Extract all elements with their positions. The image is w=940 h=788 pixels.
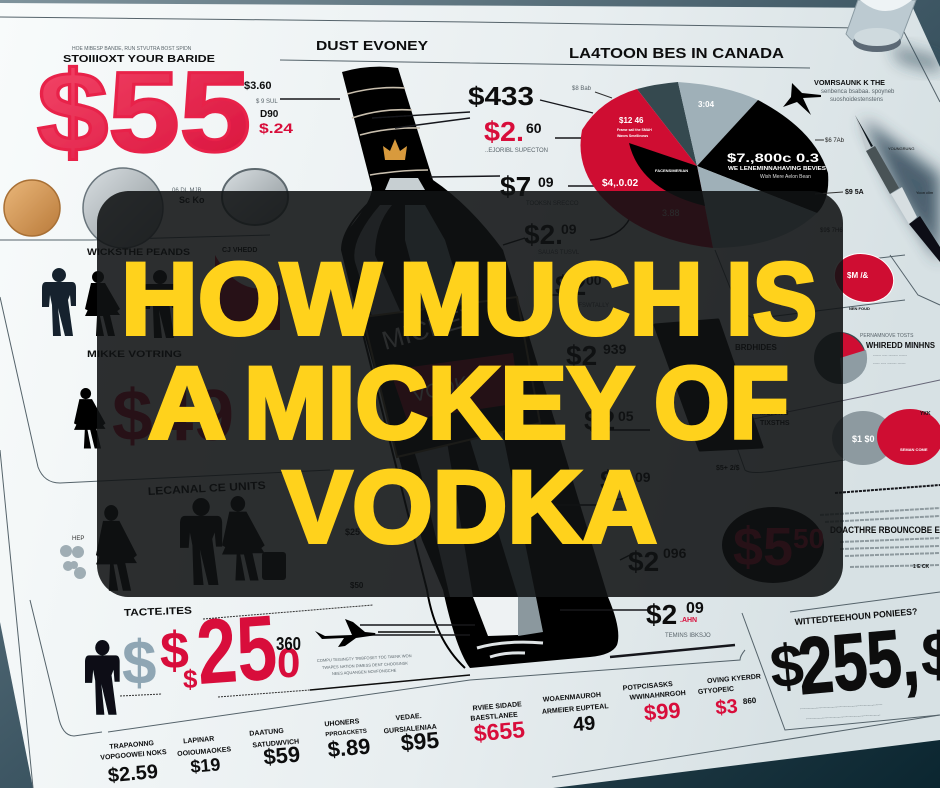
black price ellipse: 50 bbox=[793, 523, 824, 554]
coins bbox=[4, 168, 288, 248]
venn: SEMAN COME bbox=[900, 447, 928, 452]
panel: demographics left: CJ VHEDD bbox=[222, 247, 257, 254]
bottom price strip: GURSIALENIAA bbox=[383, 724, 437, 735]
pie chart: $4,.0.02 bbox=[602, 178, 639, 189]
price column: $2 bbox=[555, 270, 586, 301]
bottom price strip: TRAPAONNG bbox=[109, 740, 155, 751]
right column charts: YKK bbox=[920, 411, 931, 417]
top-left heading: STOIIIOXT YOUR BARIDE bbox=[63, 54, 215, 65]
bottom price strip: WOAENMAUROH bbox=[543, 692, 601, 704]
pie chart: $12 46 bbox=[619, 116, 644, 125]
bottom price strip: 49 bbox=[572, 712, 596, 736]
title: HOW bbox=[121, 242, 382, 356]
price column: SAUAS TUSVL bbox=[538, 250, 580, 256]
bottom price strip: LAPINAR bbox=[183, 736, 215, 745]
bottom price strip: VEDAE. bbox=[395, 713, 422, 722]
section headings: DUST EVONEY bbox=[316, 38, 428, 53]
side prices bbox=[244, 80, 293, 136]
price column bbox=[280, 81, 735, 657]
price column: ..EJORIBL SUPECTON bbox=[485, 148, 548, 154]
bottle label: VODKA bbox=[410, 370, 484, 407]
top-left heading: HOE MIBESP BANDE, RUN STVUTRA BOST SPIDN bbox=[72, 46, 192, 52]
bottle label: MICKEY bbox=[378, 299, 482, 356]
phone bbox=[655, 320, 762, 450]
price column: $2 bbox=[584, 405, 615, 436]
bottom price strip: VOPGOOWEI NOKS bbox=[100, 749, 167, 762]
top-right caption: VOMRSAUNK K THE bbox=[814, 80, 885, 87]
bottom price strip: $99 bbox=[643, 697, 682, 726]
icon: pen with shadow: YOUNGRUNG bbox=[888, 146, 914, 151]
price column: BNEFSWTALLY bbox=[566, 303, 609, 309]
bottom price strip: $95 bbox=[400, 727, 440, 756]
panel: right bottom price: -------------------------------------------------------- bbox=[806, 712, 881, 721]
price column: TOOKSN SRECCO bbox=[526, 201, 579, 207]
panel: demographics left: WICKSTHE PEANDS bbox=[87, 247, 190, 257]
top-right caption: senbenca bsabaa. spoyneb bbox=[821, 89, 895, 95]
icon: person bbox=[85, 640, 120, 715]
icon: glass bbox=[846, 0, 940, 72]
right column charts: ------ ---- ------- ------ bbox=[873, 352, 908, 357]
panel: tastes with red price: NEES AQUANGEN NOVFONGCHE bbox=[332, 668, 397, 676]
bottom price strip: $19 bbox=[190, 754, 221, 777]
bottom price strip: SATUDWVICH bbox=[252, 738, 300, 750]
panel: tastes with red price: TACTE.ITES bbox=[124, 606, 192, 619]
title: A bbox=[148, 346, 226, 460]
bottle bbox=[342, 67, 618, 668]
title: IS bbox=[726, 242, 817, 356]
pie chart: Wish Mere Aelon Bean bbox=[760, 174, 811, 180]
pie chart: WE LENEMINNAHAVING BEVIES bbox=[728, 166, 827, 172]
pie chart: 3:04 bbox=[698, 100, 715, 109]
panel: tastes with red price: COMPU TEISINGTY TRIBFOSET TOC TAENK WON bbox=[317, 653, 412, 663]
bottom price strip: OOIOUMAOKES bbox=[177, 746, 232, 758]
bottom price strip: RVIEE SIDADE bbox=[472, 701, 522, 712]
price column: $2 bbox=[566, 340, 597, 371]
pie small bbox=[814, 332, 867, 384]
pie chart: $7.,800c 0.3 bbox=[727, 151, 819, 165]
title: VODKA bbox=[283, 450, 657, 564]
side prices: $ 9 SUL bbox=[256, 99, 278, 105]
bottom price strip: $.89 bbox=[327, 733, 371, 762]
venn: $1 $0 bbox=[852, 434, 875, 444]
pie labels bbox=[572, 86, 864, 234]
price column: 00 bbox=[586, 272, 602, 288]
right column charts: $M /& bbox=[847, 271, 869, 280]
bottom price strip: $59 bbox=[262, 741, 301, 770]
title: MICKEY bbox=[244, 346, 634, 460]
price column: TEMINS IBKSJO bbox=[665, 633, 711, 639]
bottle highlights bbox=[347, 88, 428, 175]
bottom price strip: $655 bbox=[473, 716, 526, 746]
panel: tastes with red price: $ bbox=[122, 629, 156, 698]
title: OF bbox=[654, 346, 789, 460]
panel: demographics left: MIKKE VOTRING bbox=[87, 349, 182, 359]
title: MUCH bbox=[399, 242, 703, 356]
coins: Sc Ko bbox=[179, 195, 205, 205]
bottom price strip: DAATUNG bbox=[249, 728, 285, 738]
icon: pen with shadow bbox=[855, 115, 940, 262]
right column charts: $5+ 2/$ bbox=[716, 465, 740, 472]
pie labels: $9 5A bbox=[845, 189, 864, 196]
side prices: $.24 bbox=[259, 120, 293, 136]
top-left heading bbox=[63, 46, 215, 65]
price column: $2 bbox=[646, 599, 677, 630]
red price ghost: $49 bbox=[112, 376, 234, 456]
panel: right bottom price: $ bbox=[767, 631, 806, 701]
black price ellipse bbox=[722, 507, 824, 583]
venn bbox=[832, 409, 940, 465]
section headings bbox=[316, 38, 784, 62]
panel: tastes with red price: TWAPES NATION DIMESS DENT CHOOSINSK bbox=[322, 660, 408, 670]
icon: pen with shadow: Yoon clim bbox=[916, 190, 934, 195]
panel: tastes with red price: 25 bbox=[193, 597, 280, 704]
panel: right bottom price: WITTEDTEEHOUN PONIEES? bbox=[794, 606, 918, 627]
pie chart: Frame sail the SMAH bbox=[617, 128, 652, 132]
icons: people bbox=[42, 268, 286, 591]
title bbox=[121, 242, 817, 564]
dark title overlay bbox=[97, 191, 843, 597]
bottom price strip: UHONERS bbox=[324, 718, 360, 728]
bottle label bbox=[363, 297, 540, 457]
price column: $2. bbox=[484, 116, 524, 147]
bottom price strip: ARMEIER EUPTEAL bbox=[542, 703, 610, 716]
pie labels: $8 Bab bbox=[572, 86, 592, 92]
right column charts: MUPATS bbox=[760, 410, 789, 417]
pie chart: 3.88 bbox=[662, 208, 680, 218]
top-right caption bbox=[814, 80, 895, 103]
bottom price strip: $2.59 bbox=[107, 761, 159, 787]
price column: 09 bbox=[686, 600, 704, 617]
right column charts: NEN FOUD bbox=[849, 306, 870, 311]
price column: 05 bbox=[618, 408, 634, 424]
section headings: LA4TOON BES IN CANADA bbox=[569, 45, 784, 62]
panel: tastes with red price: 0 bbox=[277, 639, 300, 686]
pie chart: Waves Smellinows bbox=[617, 134, 648, 138]
big red price: $55 bbox=[37, 49, 251, 176]
panel: demographics left: HEP bbox=[72, 536, 84, 542]
price column: $433 bbox=[468, 81, 534, 111]
coins: 06 DL MJB bbox=[172, 188, 201, 194]
panel: tastes with red price: 360 bbox=[276, 634, 301, 654]
price column: $2 bbox=[628, 546, 659, 577]
right column charts: ----- ---- ------- ------ bbox=[873, 360, 906, 365]
price column: $2. bbox=[524, 219, 563, 250]
bottom price strip: WWINAHNRGOH bbox=[629, 690, 686, 702]
bottom price strip: OVING KYERDR bbox=[707, 673, 761, 685]
price column: 09 bbox=[538, 174, 554, 190]
right column charts: BRDHIDES bbox=[735, 343, 777, 352]
price column: .AHN bbox=[680, 617, 697, 624]
panel: demographics left: LECANAL CE UNITS bbox=[148, 480, 266, 498]
pie chart: FACENSIMERIAN bbox=[655, 168, 688, 173]
panel: tastes with red price: $ bbox=[183, 664, 198, 694]
right column charts: TIXSTHS bbox=[760, 420, 790, 427]
crown bbox=[383, 139, 407, 160]
panel: right bottom price: -------------------------------------------------------------- bbox=[800, 702, 883, 711]
side prices: $3.60 bbox=[244, 80, 272, 92]
right column charts: 1 E CK bbox=[913, 564, 930, 570]
panel: tastes with red price bbox=[85, 597, 470, 715]
price column: 096 bbox=[663, 545, 687, 561]
bottom price strip: POTPCISASKS bbox=[622, 681, 673, 692]
bottom price strip: GTYOPEIC bbox=[698, 686, 734, 696]
price column: 09 bbox=[635, 469, 651, 485]
right column charts: PERNAMNOVE TOSTS bbox=[860, 333, 914, 339]
black price ellipse: $5 bbox=[733, 517, 793, 577]
price column: 09 bbox=[561, 221, 577, 237]
bottom price strip: 860 bbox=[743, 696, 757, 706]
top-right caption: suoshoidestenstens bbox=[830, 97, 883, 103]
bottom price strip: PPROACKETS bbox=[325, 729, 367, 738]
bottom price strip: BAESTLANEE bbox=[470, 712, 518, 723]
icon: plane lower bbox=[315, 619, 375, 647]
pie labels: $9$ 7H6 bbox=[820, 228, 843, 234]
price column: 60 bbox=[526, 120, 542, 136]
panel: demographics left: $25 bbox=[345, 527, 360, 537]
price column: $2 bbox=[600, 465, 631, 496]
price column: $7 bbox=[500, 171, 531, 202]
bottom price strip bbox=[99, 673, 764, 788]
right column charts: WHIREDD MINHNS bbox=[866, 341, 936, 350]
side prices: D90 bbox=[260, 109, 279, 120]
panel: demographics left: $50 bbox=[350, 581, 364, 590]
right column charts bbox=[655, 247, 940, 583]
panel: demographics left bbox=[42, 247, 364, 591]
panel: tastes with red price: $ bbox=[160, 622, 189, 680]
icon: plane top bbox=[783, 83, 821, 115]
price column: 939 bbox=[603, 341, 627, 357]
pie labels: $6 7Ab bbox=[825, 138, 845, 144]
pie chart bbox=[580, 82, 828, 248]
bottom price strip: $3 bbox=[715, 696, 739, 719]
